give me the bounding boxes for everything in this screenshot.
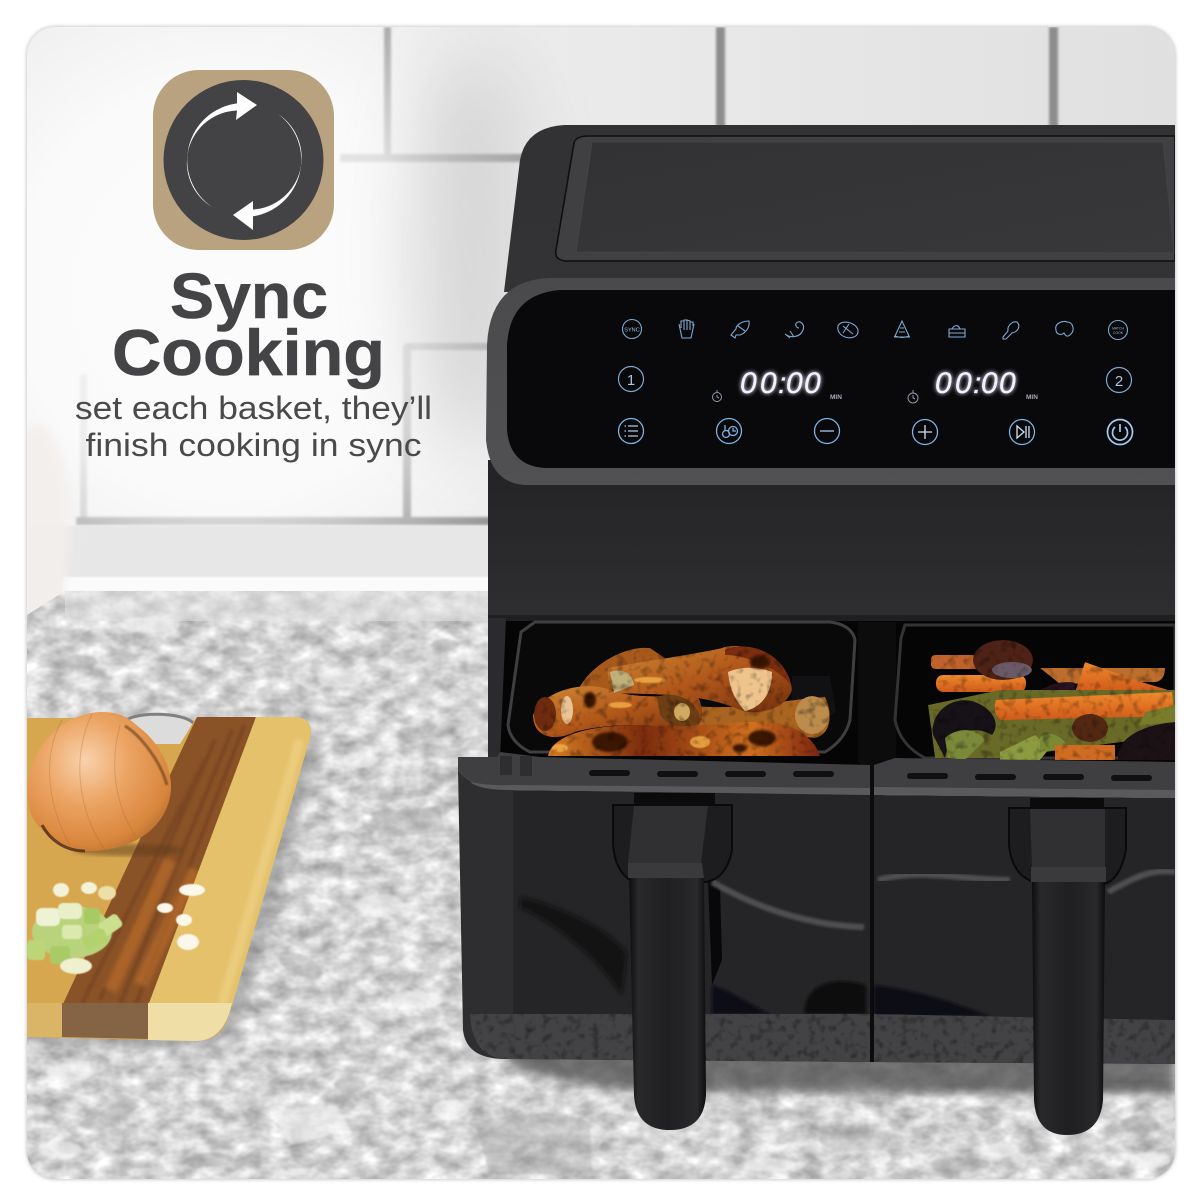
icon: sync arrows badge <box>153 70 334 250</box>
control panel <box>507 290 1175 468</box>
lower body <box>488 460 1175 622</box>
button: temperature and time <box>716 418 742 444</box>
icon: broccoli <box>1056 321 1073 336</box>
board shadow <box>27 730 320 1048</box>
left drawer handle <box>613 793 732 1130</box>
zone 2 button <box>1106 368 1132 392</box>
left basket <box>508 622 855 752</box>
icon: match cook: COOK <box>1113 331 1124 335</box>
description text: set each basket, they’ll <box>75 390 432 426</box>
heading: Cooking <box>112 316 385 389</box>
right drawer handle <box>1009 798 1126 1135</box>
button: start pause <box>1010 420 1034 444</box>
description text: finish cooking in sync <box>86 427 422 463</box>
shadow under air fryer <box>498 1059 1175 1102</box>
description text <box>75 390 432 463</box>
terrazzo counter <box>27 591 1175 1179</box>
basket cavity <box>488 615 1175 778</box>
icon: shrimp <box>785 322 804 338</box>
roasted vegetables <box>928 640 1175 760</box>
air fryer <box>458 125 1175 1135</box>
icon: pizza <box>894 321 910 338</box>
icon: sync preset: SYNC <box>624 328 640 334</box>
button: power <box>1108 420 1132 444</box>
cutting board with onion <box>27 712 320 1048</box>
onion <box>27 712 183 856</box>
icon: fish <box>731 321 749 338</box>
heading <box>112 260 385 389</box>
icon: fries <box>679 320 694 338</box>
chopped spring onion <box>27 882 205 974</box>
button: plus <box>912 420 938 444</box>
chicken drumsticks <box>533 646 830 756</box>
zone 1 button: 1 <box>627 372 635 389</box>
right drawer rim <box>874 758 1175 798</box>
board wood <box>27 717 311 1041</box>
right basket <box>895 625 1175 758</box>
icon: match cook: MATCH <box>1112 326 1124 330</box>
drawer backing <box>860 762 884 1062</box>
glossy front panel <box>513 791 870 1015</box>
icon: chicken leg <box>1003 322 1019 339</box>
board handle <box>127 712 194 744</box>
lid recess rim <box>556 136 1175 261</box>
button: menu <box>618 418 644 444</box>
min label left: MIN <box>830 394 842 401</box>
zone 1 button <box>618 366 644 392</box>
feature callout <box>75 70 432 463</box>
icon: stopwatch left <box>712 390 722 402</box>
bottom buttons row <box>618 418 1132 444</box>
min label right: MIN <box>1026 394 1038 401</box>
tiled wall <box>2 27 1175 635</box>
right drawer <box>874 758 1175 1064</box>
lid top panel <box>576 142 1174 253</box>
button: minus <box>814 418 840 444</box>
icon: stopwatch right <box>908 390 918 403</box>
left drawer <box>458 752 870 1062</box>
icon: cake <box>949 326 965 337</box>
icon: match cook <box>1108 320 1128 340</box>
zone 2 button: 2 <box>1115 373 1123 390</box>
heading: Sync <box>170 260 328 332</box>
drawer face <box>458 770 870 1062</box>
control collar <box>486 278 1175 485</box>
preset icons row <box>622 320 1128 340</box>
bottom reflection band <box>470 1014 870 1062</box>
icon: sync preset <box>622 320 642 338</box>
icon: steak <box>838 322 858 338</box>
drawer top rim <box>458 752 870 795</box>
timer display left: 00:00 <box>740 367 821 400</box>
timer display right: 00:00 <box>935 367 1016 400</box>
top lid <box>504 125 1175 292</box>
